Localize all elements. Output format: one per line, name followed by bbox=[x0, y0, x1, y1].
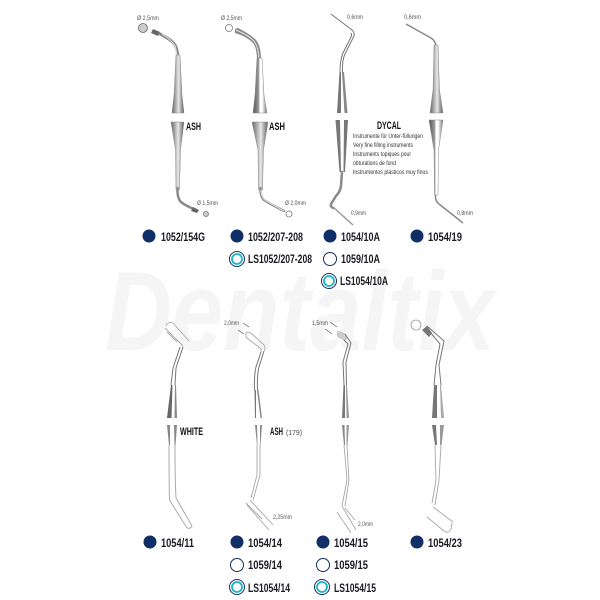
legend: 1059/15: 1059/15 bbox=[334, 558, 368, 572]
caption: ASH (179): ASH bbox=[270, 426, 283, 438]
legend: 1054/15 bbox=[316, 536, 368, 550]
caption: DYCAL description: Instrumente für Unter-füllungen bbox=[353, 133, 423, 140]
legend: LS1054/15 bbox=[314, 580, 376, 595]
caption: DYCAL description: obturations de fond bbox=[353, 160, 396, 167]
caption: DYCAL description: Instruments topiques pour bbox=[353, 151, 412, 158]
caption: ASH (179): (179) bbox=[286, 428, 302, 437]
instrument: 1052/207-208 bbox=[226, 24, 292, 217]
instrument: 1054/10A bbox=[331, 14, 354, 225]
dimension labels: top row: Ø 1,5mm bbox=[197, 200, 218, 207]
caption: DYCAL description bbox=[353, 120, 428, 176]
dimension labels: bottom row: 2,0mm bbox=[224, 320, 239, 327]
watermark: Dentaltix bbox=[105, 249, 499, 374]
legend: 1054/10A bbox=[324, 230, 380, 244]
dimension labels: top row: 0,9mm bbox=[351, 210, 366, 217]
legend: 1052/207-208 bbox=[230, 230, 303, 244]
legend: 1054/14 bbox=[230, 536, 282, 550]
legend: 1054/14: 1054/14 bbox=[248, 536, 282, 550]
dimension labels: bottom row: 2,25mm bbox=[273, 514, 292, 521]
dimension labels: top row: Ø 2,5mm bbox=[137, 15, 159, 22]
dimension labels: bottom row: 1,5mm bbox=[312, 320, 328, 327]
instrument: 1052/154G bbox=[138, 24, 208, 216]
caption: ASH second: ASH bbox=[269, 121, 285, 133]
caption: WHITE: WHITE bbox=[180, 426, 203, 438]
legend: LS1054/10A: LS1054/10A bbox=[340, 274, 388, 288]
legend: 1059/10A bbox=[324, 252, 380, 266]
legend: LS1054/14: LS1054/14 bbox=[248, 581, 290, 595]
legend: 1052/154G bbox=[142, 230, 205, 244]
legend: 1054/11 bbox=[144, 536, 194, 550]
caption: DYCAL description: Instrumentos plásticos muy finos bbox=[353, 169, 428, 176]
instrument: 1054/11 bbox=[165, 322, 192, 528]
legend: 1054/11: 1054/11 bbox=[161, 536, 194, 550]
caption: DYCAL description: DYCAL bbox=[377, 120, 401, 132]
legend: LS1052/207-208: LS1052/207-208 bbox=[248, 252, 312, 266]
dimension labels: top row: 0,6mm bbox=[404, 14, 421, 21]
caption: DYCAL description: Very fine filling instruments bbox=[353, 142, 413, 149]
legend: 1052/207-208: 1052/207-208 bbox=[248, 230, 303, 244]
instrument: 1054/19 bbox=[406, 24, 463, 223]
instrument: 1054/14 bbox=[246, 332, 273, 530]
legend: LS1054/10A bbox=[322, 274, 388, 288]
dimension labels: bottom row bbox=[224, 320, 373, 528]
legend: 1052/154G: 1052/154G bbox=[161, 230, 205, 244]
legend: LS1052/207-208 bbox=[230, 252, 312, 266]
legend: 1054/19 bbox=[410, 230, 462, 244]
legend: 1054/10A: 1054/10A bbox=[341, 230, 380, 244]
instrument: 1054/15 bbox=[337, 331, 356, 533]
dimension labels: top row bbox=[137, 14, 473, 217]
dimension labels: bottom row: 2,0mm bbox=[358, 521, 373, 528]
legend: LS1054/14 bbox=[230, 580, 290, 595]
dimension labels: top row: Ø 2,5mm bbox=[221, 15, 242, 22]
instrument: 1054/23 bbox=[411, 320, 453, 532]
dimension labels: top row: Ø 2,0mm bbox=[285, 200, 306, 207]
legend: 1054/23: 1054/23 bbox=[428, 536, 462, 550]
caption: ASH: ASH bbox=[186, 121, 201, 133]
legend: 1054/19: 1054/19 bbox=[428, 230, 462, 244]
legend: 1054/15: 1054/15 bbox=[334, 536, 368, 550]
legend: 1054/23 bbox=[410, 536, 462, 550]
legend: 1059/14 bbox=[230, 558, 282, 572]
legend: 1059/10A: 1059/10A bbox=[341, 252, 380, 266]
legend: LS1054/15: LS1054/15 bbox=[334, 581, 376, 595]
legend: 1059/14: 1059/14 bbox=[248, 558, 282, 572]
dimension labels: top row: 0,8mm bbox=[457, 210, 473, 217]
legend: 1059/15 bbox=[316, 558, 368, 572]
dimension labels: top row: 0,6mm bbox=[347, 14, 363, 21]
